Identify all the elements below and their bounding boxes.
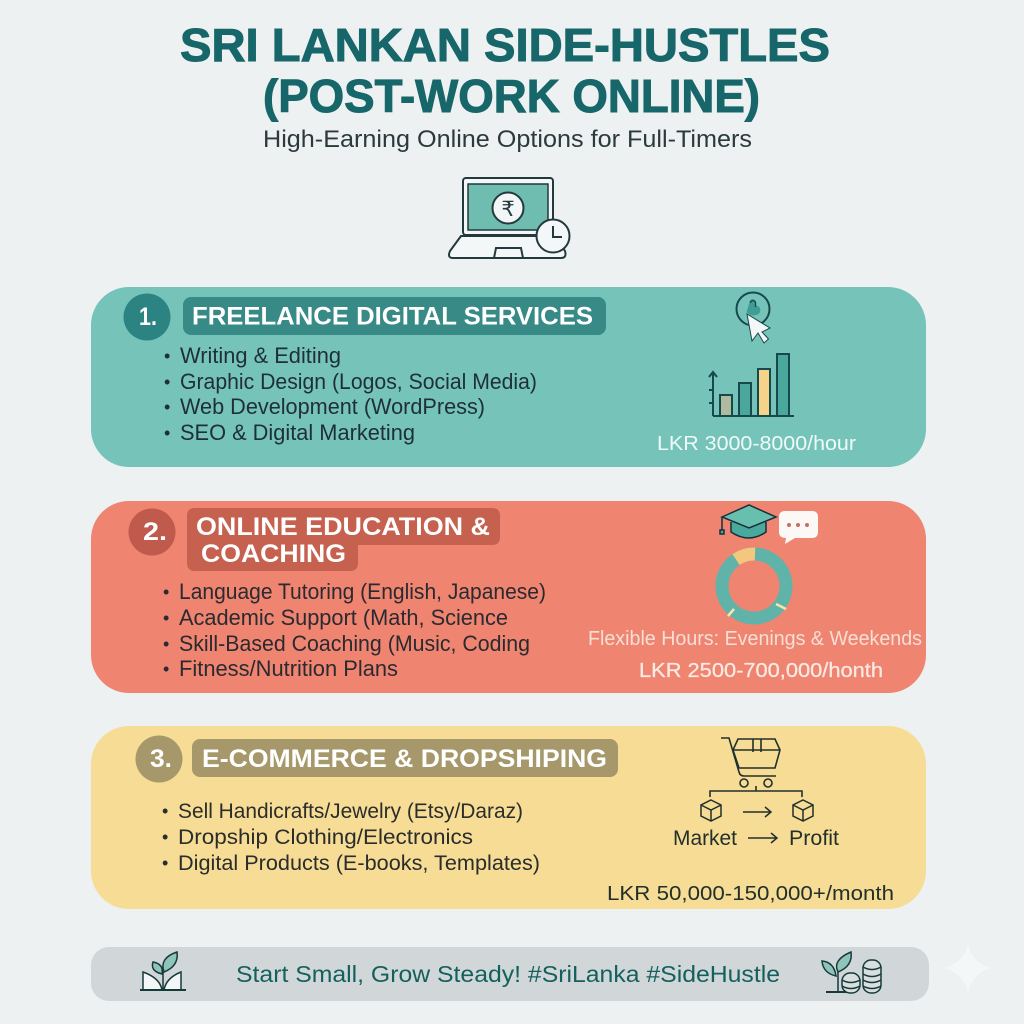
earnings: e-commerce: LKR 50,000-150,000+/month — [607, 883, 894, 905]
icon: speech bubble — [779, 511, 818, 544]
bullet list: education: Skill-Based Coaching (Music, Coding — [179, 631, 530, 656]
icon: coins and plant — [822, 952, 881, 993]
bullet list: freelance services: • — [164, 372, 170, 392]
number badge 2 — [128, 508, 176, 556]
bullet list: e-commerce — [162, 799, 540, 875]
bullet list: education: • — [163, 634, 169, 654]
number badge 3: 3. — [150, 745, 172, 773]
bullet list: e-commerce: Sell Handicrafts/Jewelry (Etsy/Daraz) — [178, 799, 523, 823]
title: (POST-WORK ONLINE) — [263, 70, 760, 122]
donut chart — [722, 554, 786, 618]
bullet list: education: Fitness/Nutrition Plans — [179, 656, 398, 681]
earnings: education: LKR 2500-700,000/honth — [639, 660, 883, 682]
bullet list: freelance services: • — [164, 397, 170, 417]
icon: sprout — [140, 952, 186, 990]
bullet list: education — [163, 579, 546, 681]
icon: box left — [701, 800, 721, 821]
icon: click cursor — [736, 292, 770, 343]
number badge 3 — [136, 736, 182, 782]
bullet list: e-commerce: • — [162, 827, 168, 847]
bullet list: education: • — [163, 582, 169, 602]
heading: e-commerce and dropshiping: E-COMMERCE & DROPSHIPING — [202, 745, 607, 773]
heading: online education and coaching: ONLINE EDUCATION & — [196, 513, 490, 541]
heading: freelance digital services — [183, 297, 606, 335]
bullet list: e-commerce: • — [162, 853, 168, 873]
icon: laptop with rupee and clock — [449, 178, 570, 258]
bullet list: e-commerce: • — [162, 801, 168, 821]
heading: online education and coaching: COACHING — [201, 540, 346, 568]
bullet list: freelance services — [164, 343, 537, 445]
panel: e-commerce and dropshipping — [91, 726, 926, 909]
icon: sparkle watermark — [944, 945, 991, 992]
bullet list: freelance services: • — [164, 423, 170, 443]
bullet list: freelance services: • — [164, 346, 170, 366]
bullet list: education: Language Tutoring (English, Japanese) — [179, 579, 546, 604]
subtitle: High-Earning Online Options for Full-Timers — [263, 126, 752, 153]
title: SRI LANKAN SIDE-HUSTLES — [180, 19, 830, 71]
heading: online education and coaching — [187, 508, 500, 571]
bar chart — [709, 354, 794, 416]
panel: freelance digital services — [91, 287, 926, 467]
footer banner — [91, 947, 929, 1001]
bullet list: e-commerce: Digital Products (E-books, Templates) — [178, 851, 540, 875]
earnings: freelance: LKR 3000-8000/hour — [657, 433, 856, 455]
footer text: Start Small, Grow Steady! #SriLanka #SideHustle — [236, 961, 780, 987]
number badge 1 — [124, 294, 170, 340]
bullet list: freelance services: Writing & Editing — [180, 343, 341, 368]
bullet list: freelance services: SEO & Digital Marketing — [180, 420, 415, 445]
bullet list: freelance services: Web Development (WordPress) — [180, 394, 485, 419]
icon: shopping cart — [710, 738, 802, 797]
market label: Market — [673, 827, 737, 850]
number badge 2: 2. — [143, 518, 167, 546]
bullet list: freelance services: Graphic Design (Logos, Social Media) — [180, 369, 537, 394]
heading: freelance digital services: FREELANCE DIGITAL SERVICES — [192, 302, 593, 330]
icon: laptop with rupee and clock: ₹ — [501, 198, 515, 221]
panel: online education and coaching — [91, 501, 926, 693]
icon: box right — [793, 800, 813, 821]
bullet list: education: • — [163, 659, 169, 679]
profit label: Profit — [789, 827, 839, 850]
number badge 1: 1. — [139, 303, 157, 331]
arrow: box to box — [743, 807, 771, 817]
flexible hours text: Flexible Hours: Evenings & Weekends — [588, 628, 922, 650]
bullet list: education: • — [163, 608, 169, 628]
bullet list: education: Academic Support (Math, Science — [179, 605, 508, 630]
heading: e-commerce and dropshiping — [192, 739, 618, 777]
title — [180, 19, 830, 122]
icon: graduation cap — [720, 505, 776, 538]
bullet list: e-commerce: Dropship Clothing/Electronics — [178, 825, 473, 849]
arrow: market to profit — [748, 833, 777, 843]
